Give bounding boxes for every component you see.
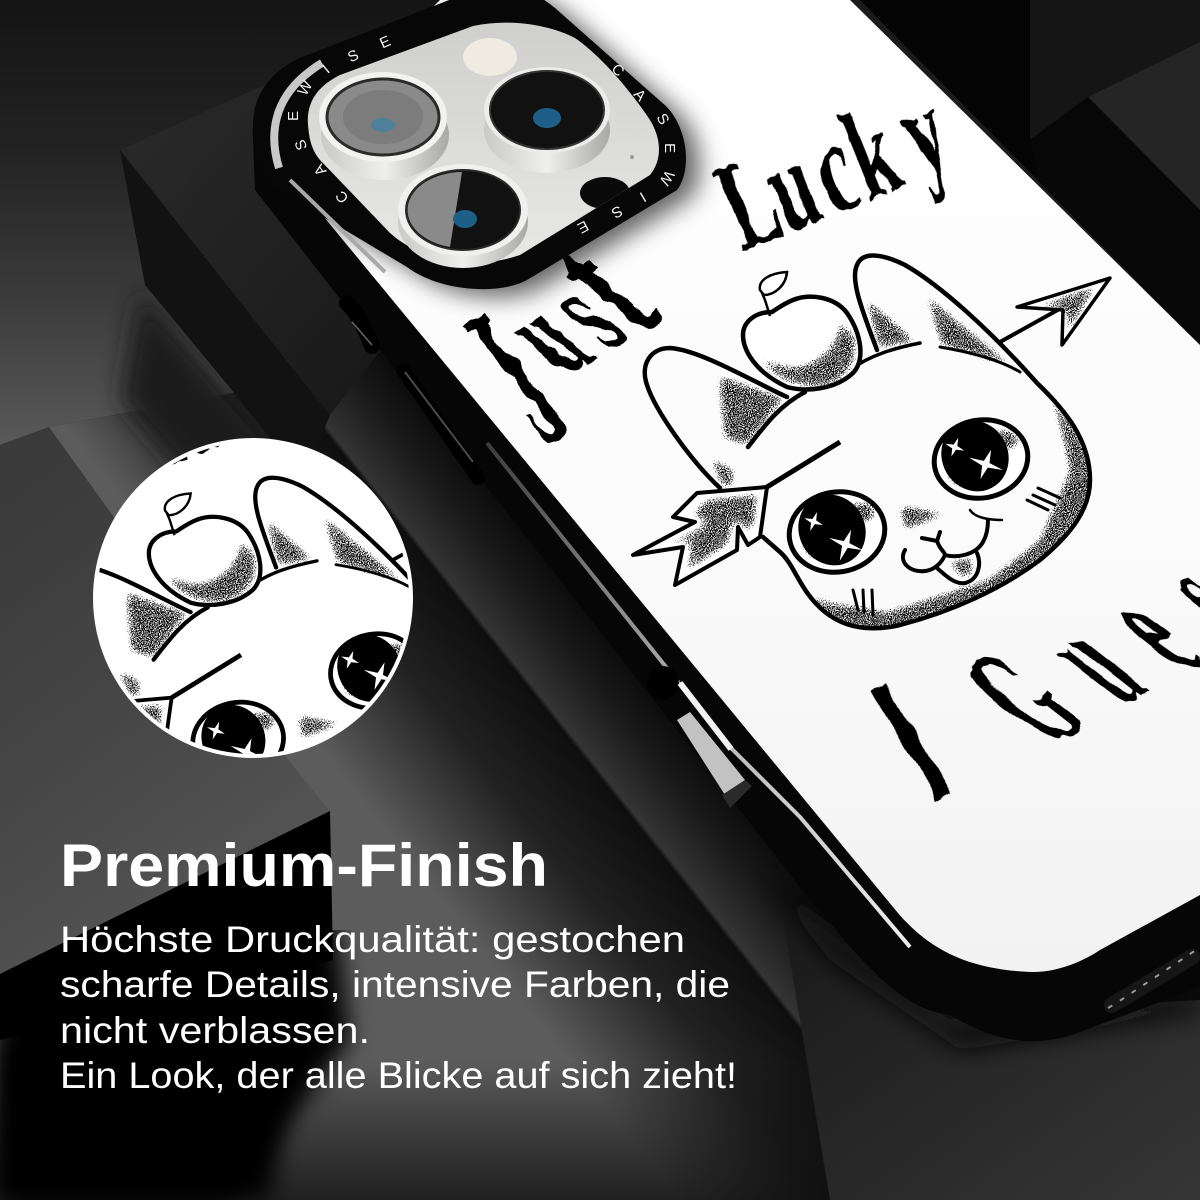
brand ring text: CASEWISE: W (295, 77, 317, 99)
mouth and tongue (903, 510, 1002, 583)
camera island (253, 0, 686, 289)
lens 2 (484, 67, 610, 173)
brand ring text: CASEWISE: S (345, 47, 361, 66)
background: top right block (850, 0, 1200, 360)
side button: volume (403, 370, 478, 478)
flash (463, 38, 517, 76)
body text: Höchste Druckqualität: gestochen (60, 919, 685, 960)
side slot: upper button (347, 303, 372, 346)
arrow tip (1000, 278, 1110, 345)
brand ring text: CASEWISE: I (637, 188, 649, 205)
lens 1 (319, 72, 449, 180)
lettering: Lucky: Lucky (698, 57, 968, 278)
cat shading stipple (707, 290, 1095, 633)
phone case body (253, 0, 1200, 1041)
cat outline (645, 256, 1090, 628)
right eye (928, 409, 1034, 506)
lettering: Just: ust (420, 204, 702, 404)
brand ring text: CASEWISE: C (332, 187, 352, 206)
phone back: white printed surface (267, 0, 1200, 972)
whiskers (853, 488, 1060, 615)
lettering: I: I (847, 645, 977, 840)
brand ring text: CASEWISE: I (319, 62, 333, 77)
heading: Premium-Finish (60, 832, 548, 899)
brand ring text: CASEWISE: C (608, 61, 628, 80)
microphone hole (580, 155, 634, 209)
body text: scharfe Details, intensive Farben, die (60, 964, 730, 1005)
brand ring text: CASEWISE: A (311, 161, 330, 179)
apple (743, 272, 860, 389)
left eye (783, 483, 891, 580)
brand ring text: CASEWISE: E (377, 33, 393, 52)
brand ring text: CASEWISE: E (574, 217, 591, 236)
lens 3 (398, 164, 528, 268)
lettering: Just (462, 255, 662, 443)
brand ring text: CASEWISE: A (630, 86, 649, 105)
brand ring text: CASEWISE: S (653, 111, 672, 128)
brand ring text: CASEWISE (285, 33, 678, 236)
brand ring text: CASEWISE: W (655, 167, 678, 189)
magnifier circle with artwork detail (93, 438, 413, 758)
brand ring text: CASEWISE: E (285, 111, 302, 121)
body text (60, 919, 737, 1096)
side power button chrome (647, 666, 752, 808)
body text: nicht verblassen. (60, 1010, 370, 1051)
brand ring text: CASEWISE: S (608, 202, 625, 221)
body text: Ein Look, der alle Blicke auf sich zieht! (60, 1055, 737, 1096)
brand ring text: CASEWISE: E (661, 143, 678, 153)
brand ring text: CASEWISE: S (292, 137, 311, 152)
charging port (1108, 950, 1196, 1008)
metal edge highlight (487, 443, 910, 947)
arrow shaft and fletching (633, 442, 840, 585)
lettering: Just: J (417, 273, 611, 483)
artwork: cat with apple, arrow and hand lettering (417, 57, 1200, 840)
